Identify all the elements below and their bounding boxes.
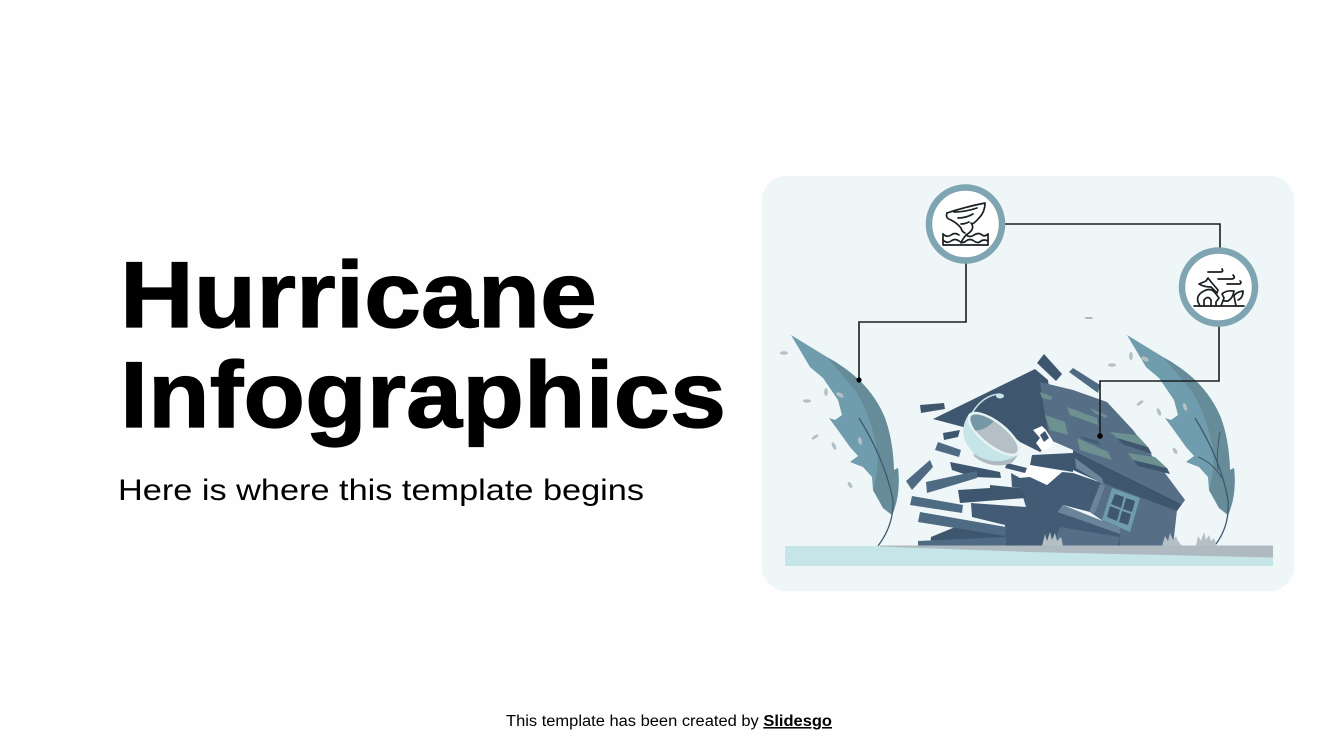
title: Hurricane [120, 242, 597, 347]
front wall [1090, 483, 1177, 546]
window [1102, 488, 1140, 532]
left leaf [780, 335, 899, 546]
title [120, 242, 726, 447]
roof shingles [1040, 392, 1167, 468]
broken wall plank [1030, 453, 1073, 472]
collapsing house [906, 317, 1217, 546]
wall trim [1058, 458, 1120, 534]
grass tufts [1042, 532, 1217, 546]
icon: wind-damaged house and trees [1182, 250, 1255, 324]
house body [971, 472, 1120, 546]
roof panel [1040, 382, 1185, 504]
icon: tornado over water [929, 188, 1002, 260]
flying bathtub [950, 394, 1027, 477]
shingle shadows [1080, 436, 1170, 474]
panel: illustration [762, 176, 1294, 591]
white roof fragment [1033, 426, 1053, 451]
eave shadow [1073, 450, 1182, 511]
connector lines [859, 224, 1220, 436]
right leaf [1108, 335, 1235, 544]
white gap [1020, 465, 1062, 485]
subtitle: Here is where this template begins [118, 474, 644, 507]
connector dots [856, 377, 1103, 439]
loose planks [906, 317, 1100, 546]
dark roof [933, 369, 1056, 452]
title: Infographics [120, 342, 726, 447]
panel background [762, 176, 1294, 591]
lower wall [1053, 527, 1120, 546]
ground [785, 546, 1273, 566]
footer credit: This template has been created by Slidesgo [506, 713, 832, 730]
